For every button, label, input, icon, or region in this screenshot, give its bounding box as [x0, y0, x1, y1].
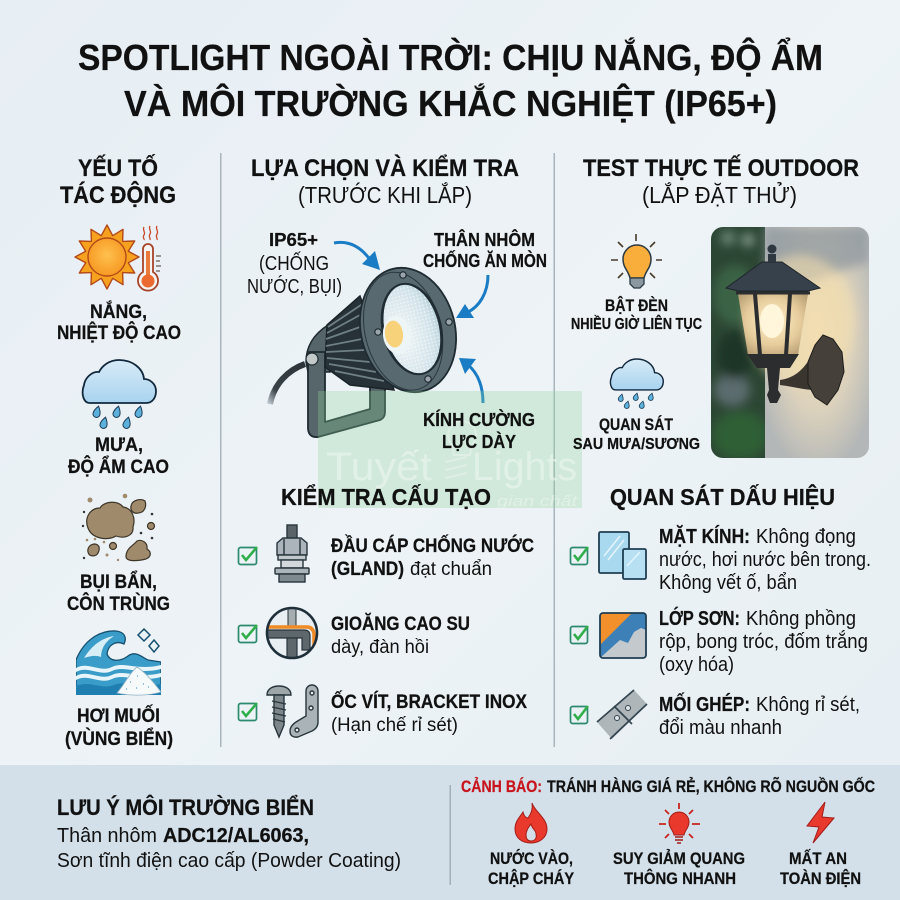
callout: ip65+: IP65+	[269, 230, 318, 250]
bracket	[306, 325, 385, 437]
label: nắng nhiệt độ cao: NHIỆT ĐỘ CAO	[57, 322, 181, 344]
icon: glass panes	[599, 532, 646, 579]
checkbox	[238, 703, 257, 720]
title: SPOTLIGHT NGOÀI TRỜI: CHỊU NẮNG, ĐỘ ẨM	[78, 36, 823, 78]
checkbox	[570, 547, 588, 564]
arrow: to ring top	[334, 242, 380, 270]
callout: ip65+: NƯỚC, BỤI)	[247, 275, 342, 298]
icon: small rain cloud	[610, 359, 663, 409]
callout: ip65+: (CHỐNG	[259, 251, 329, 275]
watermark: gian chất	[497, 493, 578, 510]
callout: thân nhôm: CHỐNG ĂN MÒN	[423, 250, 547, 271]
heading: lựa chọn và kiểm tra: (TRƯỚC KHI LẮP)	[298, 181, 472, 208]
note: môi trường biển: ADC12/AL6063,	[163, 825, 309, 847]
icon: light bulb	[611, 234, 662, 288]
heading: kiểm tra cấu tạo: KIỂM TRA CẤU TẠO	[281, 483, 491, 510]
text: GIOĂNG CAO SU	[331, 613, 470, 635]
text	[331, 691, 527, 736]
callout: kính cường lực dày	[423, 409, 535, 452]
heading: lựa chọn và kiểm tra: LỰA CHỌN VÀ KIỂM TRA	[251, 154, 519, 182]
note: môi trường biển	[57, 795, 401, 872]
item: screws and bracket	[238, 685, 527, 737]
label: mưa độ ẩm cao: ĐỘ ẨM CAO	[68, 456, 169, 478]
label: bật đèn	[571, 296, 702, 333]
text: đổi màu nhanh	[659, 717, 782, 739]
heading: quan sát dấu hiệu: QUAN SÁT DẤU HIỆU	[610, 483, 835, 510]
arrow: to housing	[456, 275, 488, 318]
item: gasket	[238, 606, 470, 662]
label	[488, 849, 575, 888]
label: THÔNG NHANH	[624, 869, 736, 888]
icon: joint plate	[597, 690, 647, 739]
callout: kính cường lực dày: KÍNH CƯỜNG	[423, 409, 535, 430]
label: hơi muối vùng biển: (VÙNG BIỂN)	[65, 728, 173, 750]
photo: wall lantern	[711, 227, 869, 459]
front ring	[347, 258, 469, 402]
panel: lựa chọn và kiểm tra	[247, 154, 547, 437]
label: TOÀN ĐIỆN	[780, 869, 861, 888]
text: Không đọng	[756, 526, 856, 548]
item: lớp sơn	[570, 606, 868, 676]
callout: thân nhôm: THÂN NHÔM	[434, 229, 535, 250]
label: bật đèn: NHIỀU GIỜ LIÊN TỤC	[571, 315, 702, 333]
checkbox	[570, 626, 588, 644]
label: mưa độ ẩm cao: MƯA,	[95, 435, 143, 456]
watermark: Tuyết	[326, 445, 432, 489]
label: MẤT AN	[789, 849, 847, 868]
heading: yếu tố tác động: YẾU TỐ	[78, 154, 158, 182]
screws	[306, 272, 452, 382]
text: (oxy hóa)	[659, 654, 734, 676]
watermark: Lights	[472, 445, 577, 489]
text	[659, 525, 871, 594]
label: bụi bẩn côn trùng	[67, 571, 170, 615]
text: Không phồng	[746, 608, 856, 630]
icon: screw and bracket	[267, 685, 318, 737]
item: gland	[238, 525, 534, 582]
note: môi trường biển: LƯU Ý MÔI TRƯỜNG BIỂN	[57, 795, 314, 820]
text: rộp, bong tróc, đốm trắng	[659, 630, 868, 653]
icon: wave and salt	[76, 629, 161, 695]
lantern	[726, 244, 820, 403]
COB light	[380, 314, 414, 356]
text	[659, 692, 860, 739]
text: (GLAND)	[331, 559, 404, 580]
item: mặt kính	[570, 525, 871, 594]
text: ỐC VÍT, BRACKET INOX	[331, 691, 527, 713]
footer panel	[0, 765, 900, 900]
checkbox	[238, 547, 257, 564]
icon: flame	[515, 803, 547, 843]
icon: rain cloud	[83, 360, 156, 429]
watermark	[318, 391, 582, 510]
text: ĐẦU CÁP CHỐNG NƯỚC	[331, 535, 534, 557]
label: quan sát: SAU MƯA/SƯƠNG	[573, 436, 700, 453]
arrow: to glass	[459, 358, 483, 403]
text: nước, hơi nước bên trong.	[659, 549, 871, 571]
text	[659, 606, 868, 676]
housing with fins	[325, 296, 394, 390]
label	[780, 849, 861, 888]
text: (Hạn chế rỉ sét)	[331, 715, 458, 736]
warning heading: CẢNH BÁO:	[461, 777, 542, 796]
text: dày, đàn hồi	[331, 637, 429, 658]
warning: fire	[488, 803, 575, 888]
label: bụi bẩn côn trùng: BỤI BẨN,	[80, 571, 157, 593]
label: mưa độ ẩm cao	[68, 435, 169, 478]
title	[78, 36, 823, 124]
label: NƯỚC VÀO,	[490, 849, 573, 868]
label: quan sát	[573, 415, 700, 453]
label: quan sát: QUAN SÁT	[599, 415, 674, 434]
heading: test thực tế outdoor: TEST THỰC TẾ OUTDOOR	[583, 154, 859, 182]
note: môi trường biển: Thân nhôm	[57, 825, 157, 847]
text: MỐI GHÉP:	[659, 692, 750, 716]
checkbox	[570, 706, 588, 724]
label	[613, 849, 745, 888]
heading: yếu tố tác động	[60, 154, 176, 209]
icon: paint layers	[600, 613, 646, 658]
text: MẶT KÍNH:	[659, 525, 750, 548]
text: đạt chuẩn	[410, 559, 492, 580]
item: mối ghép	[570, 690, 860, 739]
checkbox	[238, 625, 257, 642]
text: LỚP SƠN:	[659, 606, 740, 630]
label: hơi muối vùng biển	[65, 705, 173, 750]
callout: thân nhôm	[423, 229, 547, 271]
label: nắng nhiệt độ cao	[57, 301, 181, 344]
label: bụi bẩn côn trùng: CÔN TRÙNG	[67, 593, 170, 615]
icon: red bulb	[659, 803, 700, 843]
note: môi trường biển: Sơn tĩnh điện cao cấp (Powder Coating)	[57, 850, 401, 872]
illustration: spotlight	[270, 258, 469, 437]
label: hơi muối vùng biển: HƠI MUỐI	[77, 705, 160, 727]
warning: lumen drop	[613, 803, 745, 888]
heading: yếu tố tác động: TÁC ĐỘNG	[60, 181, 176, 209]
text	[331, 535, 534, 580]
text: Không vết ố, bẩn	[659, 572, 797, 594]
warning: electrical safety	[780, 802, 861, 888]
wall bracket	[780, 335, 844, 405]
icon: cable gland	[275, 525, 309, 582]
icon: sun and thermometer	[75, 225, 161, 291]
panel: yếu tố tác động	[57, 154, 181, 750]
icon: gasket cross-section	[267, 606, 317, 662]
cable	[270, 364, 305, 404]
label: SUY GIẢM QUANG	[613, 849, 745, 868]
label: bật đèn: BẬT ĐÈN	[605, 296, 668, 315]
title: VÀ MÔI TRƯỜNG KHẮC NGHIỆT (IP65+)	[124, 82, 777, 124]
text: Không rỉ sét,	[756, 694, 860, 716]
heading: test thực tế outdoor: (LẮP ĐẶT THỬ)	[642, 180, 797, 208]
callout: ip65+	[247, 230, 342, 298]
label: nắng nhiệt độ cao: NẮNG,	[90, 301, 147, 323]
callout: kính cường lực dày: LỰC DÀY	[442, 431, 516, 452]
icon: lightning	[807, 802, 834, 843]
heading: test thực tế outdoor	[583, 154, 859, 208]
label: CHẬP CHÁY	[488, 869, 575, 888]
text	[331, 613, 470, 658]
icon: dust	[82, 494, 154, 561]
heading: lựa chọn và kiểm tra	[251, 154, 519, 208]
